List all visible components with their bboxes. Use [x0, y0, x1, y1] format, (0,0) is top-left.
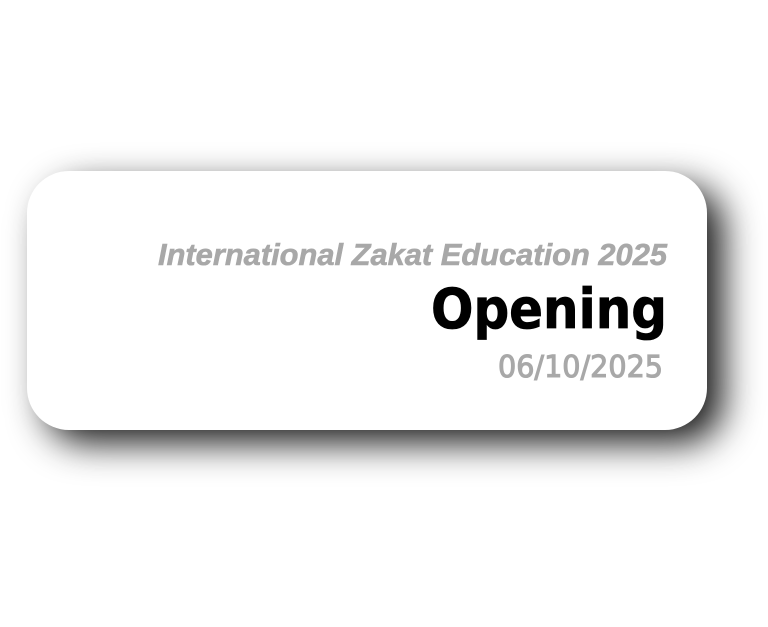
- date: 06/10/2025: [498, 350, 663, 385]
- heading: Opening: Opening: [431, 277, 667, 341]
- event title: International Zakat Education 2025: [158, 237, 668, 272]
- card panel: [27, 171, 707, 430]
